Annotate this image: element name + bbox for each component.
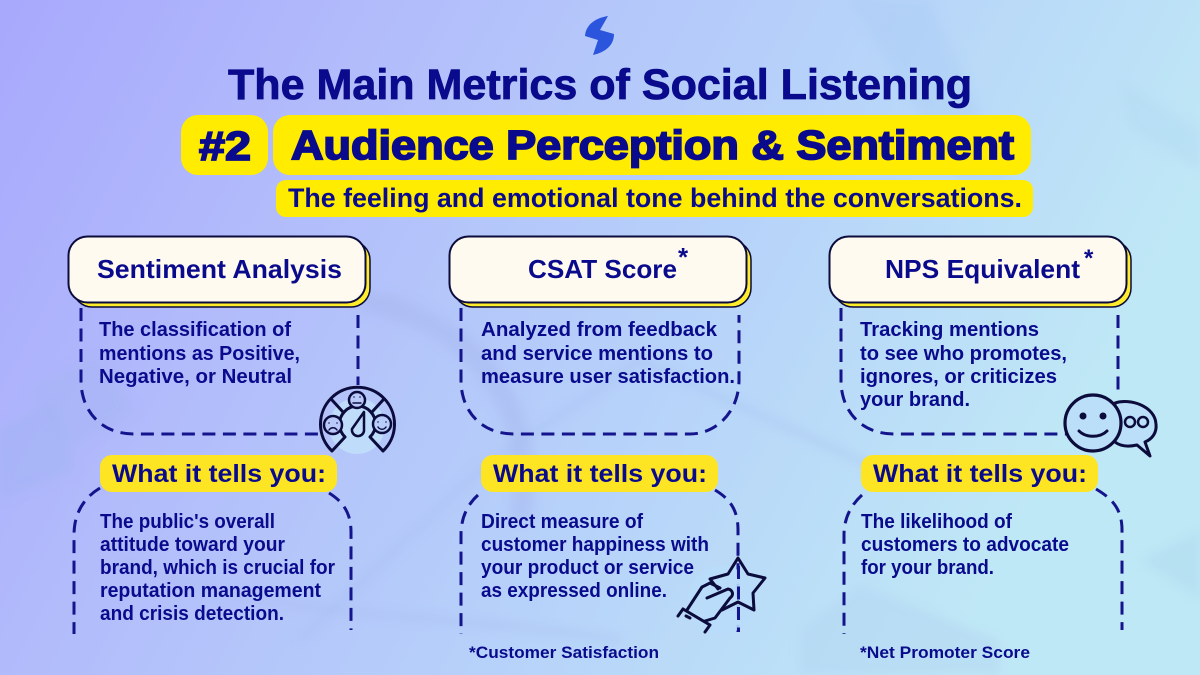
icon: smiley with speech bubble: [1065, 395, 1156, 456]
label: what it tells you: What it tells you:: [873, 460, 1087, 488]
text: meaning: brand, which is crucial for: [100, 557, 335, 579]
text: meaning: customer happiness with: [481, 534, 709, 556]
text: meaning: The likelihood of: [861, 511, 1012, 533]
card header: csat score: *: [678, 242, 689, 272]
dashed frame: definition: [461, 308, 739, 434]
card header: nps equivalent: *: [1084, 245, 1094, 272]
dashed frame: definition: [841, 308, 1118, 434]
text: definition: and service mentions to: [481, 343, 713, 365]
footnote: net promoter score: *Net Promoter Score: [860, 643, 1030, 662]
text: definition: measure user satisfaction.: [481, 366, 735, 388]
panel: csat score: [450, 236, 765, 662]
text: definition: your brand.: [860, 389, 970, 411]
text: meaning: for your brand.: [861, 557, 994, 579]
card header: nps equivalent: [830, 236, 1131, 307]
panel: nps equivalent: [830, 236, 1156, 662]
card header: nps equivalent: NPS Equivalent: [885, 254, 1080, 284]
footnote: customer satisfaction: *Customer Satisfaction: [469, 643, 659, 662]
heading: audience perception and sentiment: [273, 115, 1031, 175]
text: definition: The classification of: [99, 319, 291, 341]
text: meaning: The public's overall: [100, 511, 275, 533]
text: definition: mentions as Positive,: [99, 343, 300, 365]
dashed frame: definition: [81, 308, 358, 434]
heading: audience perception and sentiment: Audience Perception & Sentiment: [291, 122, 1014, 168]
card header: sentiment analysis: Sentiment Analysis: [97, 254, 342, 284]
text: definition: Tracking mentions: [860, 319, 1039, 341]
panel: sentiment analysis: [68, 236, 395, 634]
card header: csat score: CSAT Score: [528, 254, 677, 284]
card header: sentiment analysis: [68, 236, 370, 307]
subtitle: The feeling and emotional tone behind the conversations.: [288, 183, 1022, 213]
text: meaning: as expressed online.: [481, 580, 667, 602]
text: meaning: and crisis detection.: [100, 603, 284, 625]
text: definition: ignores, or criticizes: [860, 366, 1057, 388]
dashed frame: meaning: [844, 489, 1122, 634]
dashed frame: meaning: [461, 490, 738, 634]
text: meaning: reputation management: [100, 580, 321, 602]
icon: logo: [585, 16, 614, 55]
badge: number 2: [181, 115, 268, 175]
dashed frame: meaning: [74, 488, 351, 634]
label: what it tells you: [100, 455, 337, 492]
text: meaning: Direct measure of: [481, 511, 643, 533]
text: definition: Analyzed from feedback: [481, 319, 718, 341]
text: meaning: customers to advocate: [861, 534, 1069, 556]
text: meaning: attitude toward your: [100, 534, 285, 556]
label: what it tells you: What it tells you:: [493, 460, 707, 488]
icon: sentiment gauge: [321, 387, 395, 454]
title: The Main Metrics of Social Listening: [228, 61, 972, 109]
label: what it tells you: [481, 455, 718, 492]
card header: csat score: [450, 236, 751, 307]
icon: hand holding star: [678, 558, 765, 634]
text: definition: to see who promotes,: [860, 343, 1067, 365]
label: what it tells you: What it tells you:: [112, 460, 326, 488]
badge: number 2: #2: [199, 123, 251, 169]
text: meaning: your product or service: [481, 557, 694, 579]
label: what it tells you: [861, 455, 1098, 492]
text: definition: Negative, or Neutral: [99, 366, 292, 388]
